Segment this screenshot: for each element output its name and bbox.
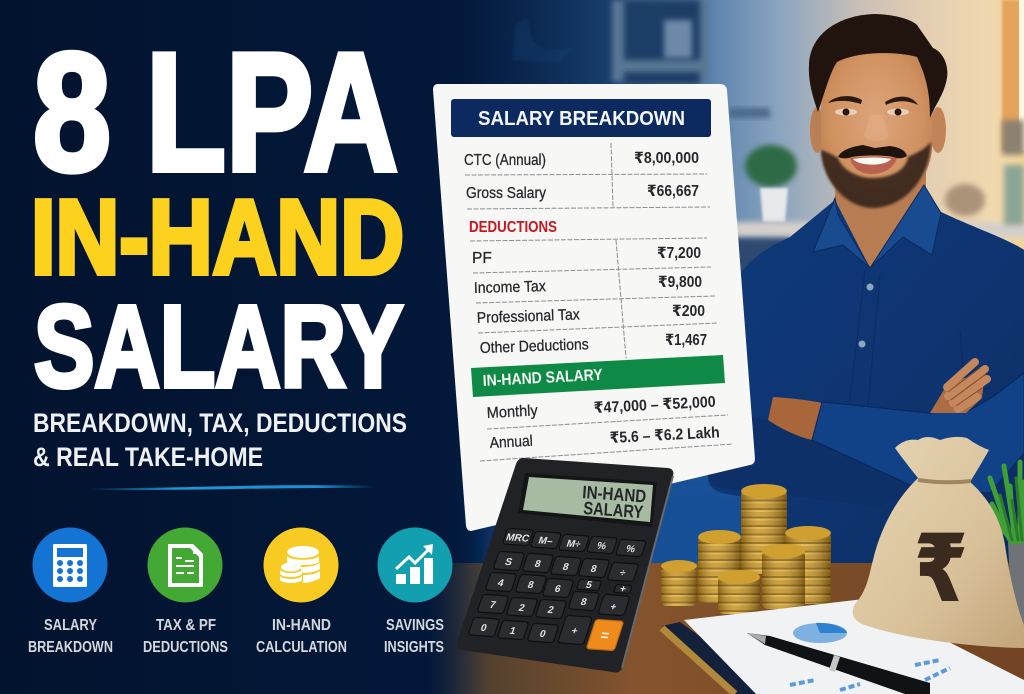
coin stack: front tall	[762, 544, 805, 609]
row: PF	[472, 245, 701, 267]
keypad: 7	[488, 600, 497, 611]
row: PF: ₹7,200	[657, 245, 701, 262]
keypad: +	[618, 584, 628, 595]
bag tie	[918, 480, 971, 482]
paper sheet	[433, 84, 755, 531]
title line: 8 LPA	[33, 18, 398, 206]
label: SALARY	[44, 617, 97, 634]
title line: salary: SALARY	[34, 282, 403, 412]
keypad: %	[595, 541, 608, 552]
hand	[930, 362, 987, 413]
row: annual	[489, 424, 720, 452]
printed figures	[790, 660, 950, 690]
row: gross salary	[466, 183, 699, 202]
rupee symbol: ₹	[915, 516, 967, 622]
display: IN-HAND	[582, 482, 647, 506]
label: DEDUCTIONS	[143, 639, 228, 656]
row: gross salary: ₹66,667	[647, 183, 699, 200]
row: monthly: Monthly	[486, 402, 538, 422]
display: SALARY	[583, 498, 644, 522]
in-hand salary banner	[471, 355, 725, 397]
header bar: SALARY BREAKDOWN	[478, 108, 685, 130]
paper: salary breakdown sheet	[433, 84, 755, 531]
title line: 8 LPA: LPA	[146, 18, 398, 206]
label: SAVINGS	[386, 617, 444, 634]
row: annual: ₹5.6 – ₹6.2 Lakh	[609, 424, 720, 447]
row: monthly: ₹47,000 – ₹52,000	[593, 394, 716, 417]
keypad: +	[609, 602, 618, 613]
keypad: 6	[553, 584, 562, 595]
neck	[834, 170, 926, 270]
title	[31, 18, 404, 412]
label: CALCULATION	[256, 639, 347, 656]
keypad	[468, 528, 647, 651]
feature: salary breakdown	[28, 528, 113, 656]
potted plant	[990, 462, 1024, 625]
calculator	[457, 458, 673, 672]
coin stack: left small	[661, 560, 697, 606]
shirt	[708, 190, 1024, 565]
keypad: 4	[496, 578, 505, 589]
row: CTC: CTC (Annual)	[464, 152, 546, 169]
row: CTC: ₹8,00,000	[634, 150, 699, 167]
in-hand salary banner: IN-HAND SALARY	[482, 367, 603, 390]
ears	[810, 107, 824, 153]
eyebrows	[828, 96, 918, 105]
row: gross salary: Gross Salary	[466, 185, 546, 202]
gold pen	[662, 628, 735, 694]
row: income tax	[474, 274, 702, 297]
label: INSIGHTS	[384, 639, 444, 656]
keypad: 8	[579, 597, 588, 608]
face	[821, 46, 932, 208]
row: professional tax: Professional Tax	[477, 306, 580, 327]
hair	[809, 14, 947, 118]
row: income tax: Income Tax	[474, 278, 546, 297]
coin stack: middle	[698, 530, 741, 603]
row: other deductions: Other Deductions	[480, 336, 589, 357]
accent streak	[90, 486, 375, 489]
header bar	[451, 99, 711, 137]
paper	[684, 599, 1024, 694]
keypad: ÷	[618, 568, 627, 579]
document on desk	[662, 599, 1024, 694]
row: annual: Annual	[489, 433, 533, 452]
forearm	[768, 397, 822, 440]
nose	[864, 115, 889, 141]
coin stack: tall	[741, 484, 787, 574]
collar	[813, 185, 941, 268]
feature: savings insights	[378, 528, 452, 656]
row: CTC	[464, 150, 699, 169]
display bezel	[518, 473, 657, 527]
icon: document	[148, 528, 222, 602]
label	[28, 617, 113, 656]
row: PF: PF	[472, 250, 492, 267]
shirt placket	[850, 270, 965, 405]
display	[523, 477, 653, 522]
label	[384, 617, 444, 656]
label	[256, 617, 347, 656]
keypad: 8	[533, 559, 542, 570]
pen	[747, 633, 930, 694]
icon: calculator	[32, 528, 108, 602]
row: income tax: ₹9,800	[658, 274, 702, 291]
person	[708, 14, 1024, 565]
label	[143, 617, 228, 656]
row: professional tax	[477, 303, 705, 327]
icon: coins	[264, 528, 338, 602]
feature: tax and pf deductions	[143, 528, 228, 656]
row: professional tax: ₹200	[672, 303, 705, 320]
blurred office backdrop	[512, 0, 1024, 278]
keypad: S	[503, 557, 514, 568]
keypad: 2	[546, 605, 555, 616]
pie chart	[793, 623, 847, 643]
keypad: MRC	[504, 532, 531, 545]
body	[457, 458, 673, 672]
keypad: 2	[517, 603, 526, 614]
eyes	[835, 108, 909, 116]
subtitle: BREAKDOWN, TAX, DEDUCTIONS	[33, 408, 407, 438]
mustache	[838, 145, 907, 158]
keypad: 0	[479, 623, 488, 634]
label: TAX & PF	[156, 617, 216, 634]
keypad: 0	[538, 629, 547, 640]
title line: 8 LPA: 8	[33, 18, 111, 206]
crossed arms	[708, 362, 1024, 507]
table	[430, 563, 1024, 694]
lower sleeve	[708, 417, 917, 507]
keypad: +	[570, 626, 579, 637]
row: monthly	[486, 394, 716, 422]
subtitle: & REAL TAKE-HOME	[33, 442, 263, 472]
gold coin stacks	[661, 484, 831, 614]
subtitle	[33, 408, 407, 472]
row: other deductions	[480, 332, 707, 357]
coin stack: front small	[718, 570, 760, 614]
shirt buttons	[858, 284, 874, 348]
feature: in-hand calculation	[256, 528, 347, 656]
keypad: 8	[526, 580, 535, 591]
label: BREAKDOWN	[28, 639, 113, 656]
keypad: 5	[584, 580, 594, 591]
keypad: 8	[561, 562, 570, 573]
keypad: %	[624, 544, 637, 555]
money bag	[853, 437, 1024, 648]
icon: growth chart	[378, 528, 452, 602]
keypad: 8	[589, 564, 598, 575]
clipboard	[662, 622, 780, 694]
table rules	[465, 143, 733, 461]
keypad: =	[598, 628, 611, 644]
smile	[850, 156, 897, 174]
upper sleeve	[812, 373, 1024, 493]
row: other deductions: ₹1,467	[665, 332, 707, 349]
keypad: M÷	[565, 539, 583, 550]
keypad: M–	[537, 536, 555, 547]
label: IN-HAND	[272, 617, 331, 634]
title line: in-hand: IN-HAND	[31, 178, 404, 296]
coin stack: right	[785, 526, 831, 604]
deductions heading: DEDUCTIONS	[469, 219, 557, 236]
beard	[821, 142, 931, 208]
keypad: 1	[508, 626, 517, 637]
